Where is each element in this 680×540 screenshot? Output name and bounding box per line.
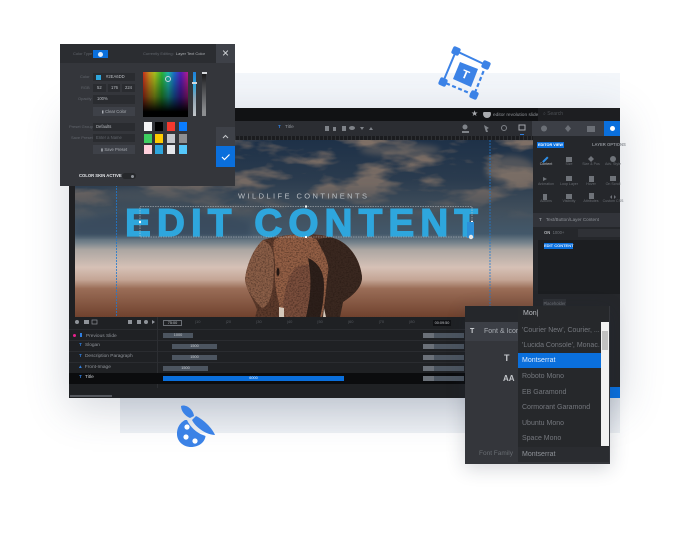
clear color button	[93, 107, 135, 116]
search box: ⌕ Search	[543, 111, 563, 117]
left ear	[245, 240, 274, 308]
swatches row 2	[144, 134, 187, 143]
resize handle	[467, 222, 474, 239]
star icon: ★	[471, 109, 478, 118]
ears and body	[245, 234, 362, 317]
bar: title: 6000	[249, 376, 258, 380]
row: slogan: T Slogan	[79, 342, 100, 348]
option labels row 3: Visibility	[563, 199, 575, 203]
icon: text layer	[438, 46, 491, 100]
opacity input: 100%	[97, 96, 108, 101]
eyes	[276, 268, 280, 276]
side ruler	[69, 136, 75, 317]
option labels row 3	[540, 199, 624, 203]
editor window	[69, 108, 620, 398]
save button sliver	[610, 387, 620, 398]
color input: #2EA6DD	[106, 74, 125, 79]
font and icon header	[465, 322, 518, 341]
cloud masses	[90, 144, 535, 203]
rgb label: RGB	[81, 85, 90, 90]
color type label: Color Type	[73, 51, 92, 56]
save preset button	[93, 145, 135, 154]
option labels row 2: Animation	[538, 182, 554, 186]
placeholder tab: Placeholder	[543, 301, 566, 306]
editing label: Currently Editing: Layer Text Color	[143, 51, 205, 56]
right ear	[317, 238, 362, 317]
skin texture	[245, 233, 363, 317]
end block 4	[423, 366, 464, 371]
bar: slogan: 1500	[190, 344, 199, 348]
option labels row 1: Size	[566, 162, 572, 166]
text area	[538, 240, 620, 294]
color type button	[93, 50, 108, 58]
save preset input: Enter a Name	[96, 135, 122, 140]
canvas: slide preview	[75, 140, 533, 317]
opacity label: Opacity	[78, 96, 92, 101]
selection box	[139, 206, 473, 238]
preset group select	[93, 123, 135, 131]
end block 2	[423, 344, 464, 349]
font family select	[518, 447, 609, 462]
layer options: LAYER OPTIONS	[592, 142, 626, 147]
color skin active: COLOR SKIN ACTIVE	[79, 173, 122, 178]
search text: Mon|	[523, 310, 538, 317]
active tab	[604, 121, 620, 136]
toggle	[122, 173, 136, 179]
bar: front image	[163, 366, 208, 371]
user name	[483, 112, 539, 118]
slogan: WILDLIFE CONTINENTS	[238, 192, 367, 200]
alpha slider	[202, 72, 206, 116]
option labels row 3: Custom CSS	[603, 199, 623, 203]
tab icons	[541, 125, 595, 132]
option labels row 1	[540, 162, 621, 166]
layer title: T Title	[278, 125, 294, 130]
save preset label: Save Preset	[71, 135, 93, 140]
toolbar	[69, 121, 532, 136]
bar: title	[163, 376, 344, 381]
side panel	[533, 136, 620, 398]
option: courier: 'Courier New', Courier, ...	[522, 327, 600, 334]
toolbar icons	[325, 124, 526, 135]
user name: editor revolution slider	[493, 113, 539, 118]
option: roboto mono: Roboto Mono	[522, 373, 564, 380]
clear color button: ▮ Clear Color	[102, 109, 126, 114]
option: eb garamond: EB Garamond	[522, 389, 566, 396]
icon: palette	[177, 406, 215, 447]
option: cormorant: Cormorant Garamond	[522, 404, 590, 411]
font and icon header: T	[470, 328, 474, 335]
id row: ON 1000+	[544, 230, 564, 235]
timeline	[69, 317, 533, 398]
spacing icon: AA	[503, 374, 515, 383]
picker handle	[165, 76, 171, 82]
bar: front image: 1500	[181, 366, 190, 370]
bar: slogan	[172, 344, 217, 349]
elephant	[245, 233, 363, 317]
end block 1	[423, 333, 464, 338]
rgb inputs: 52	[97, 85, 102, 90]
end block 5	[423, 376, 464, 381]
panel top	[465, 306, 518, 322]
rgb inputs: 176	[111, 85, 118, 90]
save preset input	[93, 134, 135, 142]
hue slider	[193, 72, 196, 116]
scrollbar	[70, 395, 112, 397]
swatches row 1	[144, 122, 187, 131]
swatches row 3	[144, 145, 187, 154]
preset group select: Defaults	[96, 124, 111, 129]
option icons	[542, 156, 616, 200]
option labels row 2: Hover	[586, 182, 596, 186]
preset group label: Preset Group	[69, 124, 93, 129]
color field: Color	[80, 74, 90, 79]
placeholder tab	[543, 299, 566, 310]
color picker	[143, 72, 188, 117]
option labels row 2: Loop Layer	[560, 182, 578, 186]
current time	[163, 320, 182, 326]
bar: description: 1500	[190, 355, 199, 359]
divider	[157, 317, 158, 388]
rgb inputs	[93, 84, 135, 92]
end time: 00:09:50	[435, 320, 449, 324]
selected row	[69, 373, 533, 384]
font family select: Montserrat	[522, 451, 555, 458]
close button: ×	[222, 46, 229, 60]
search box	[538, 108, 620, 121]
panel header	[60, 44, 235, 63]
keyframe dot	[73, 334, 76, 336]
option: selected montserrat	[518, 353, 601, 368]
option: selected montserrat: Montserrat	[522, 357, 555, 364]
option labels row 3: Actions	[540, 199, 552, 203]
time scale labels: |10 |20 |30 |40 |50 |60 |70 |80	[195, 319, 415, 324]
option labels row 3: Attributes	[583, 199, 599, 203]
font panel	[465, 306, 610, 464]
option labels row 1: Content	[540, 162, 552, 166]
right panel tabs	[532, 121, 620, 136]
option labels row 2: On Scroll	[606, 182, 620, 186]
selected text: EDIT CONTENT	[544, 243, 574, 248]
head	[273, 235, 328, 317]
row: front image: ▲ Front-Image	[78, 364, 111, 370]
preset swatches	[144, 122, 187, 154]
trunk	[282, 265, 322, 317]
option labels row 1: Adv. Style	[605, 162, 621, 166]
mountain haze	[75, 211, 250, 236]
clouds	[75, 140, 533, 220]
background panel	[120, 73, 620, 433]
rgb inputs: 224	[125, 85, 132, 90]
section header	[533, 213, 620, 227]
timeline icons	[75, 320, 155, 324]
color input	[93, 73, 135, 81]
scroll thumb	[602, 331, 608, 350]
top bar	[69, 108, 620, 121]
confirm button	[216, 146, 235, 167]
bar: description	[172, 355, 217, 360]
end time	[433, 320, 451, 326]
color panel	[60, 44, 235, 186]
row: description: T Description Paragraph	[79, 354, 133, 358]
headline: EDIT CONTENT	[125, 202, 484, 245]
sky and ground	[75, 140, 533, 317]
up button	[216, 127, 235, 146]
scrollbar	[601, 322, 609, 446]
opacity input	[93, 95, 135, 104]
row: title: T Title	[79, 375, 94, 380]
editor view badge	[537, 142, 564, 148]
bar: previous slide	[163, 333, 193, 338]
end block 3	[423, 355, 464, 360]
icon: text layer: T	[459, 67, 472, 83]
tusks	[279, 307, 326, 317]
font family label: Font Family	[479, 450, 513, 457]
row: previous slide: Previous Slide	[86, 334, 117, 338]
guide lines	[116, 140, 490, 317]
bar: previous slide: 1000	[174, 333, 182, 337]
save preset button: ▮ Save Preset	[101, 147, 127, 152]
option labels row 1: Size & Pos	[582, 162, 600, 166]
ruler	[75, 136, 533, 140]
section header: T Text/Button/Layer Content	[539, 217, 599, 222]
current time: 75:00	[168, 320, 177, 324]
option labels row 2	[538, 182, 620, 186]
font dropdown	[518, 306, 609, 447]
option: space mono: Space Mono	[522, 435, 561, 442]
trunk shade	[306, 258, 324, 317]
close button	[216, 44, 235, 63]
option: ubuntu mono: Ubuntu Mono	[522, 420, 564, 427]
timeline right: end blocks	[423, 333, 464, 381]
id buttons	[578, 229, 620, 237]
editor view badge: EDITOR VIEW	[538, 143, 563, 147]
size icon: T	[504, 353, 510, 363]
